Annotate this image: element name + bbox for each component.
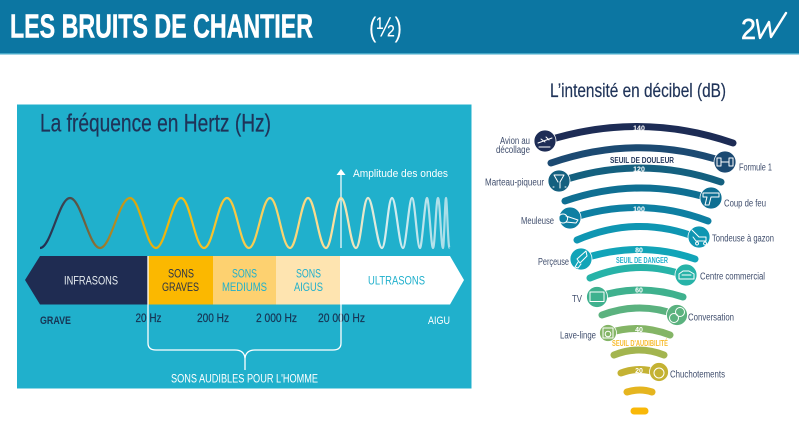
panel: frequency [17,104,472,388]
decibel values: 140 [633,126,645,132]
threshold: douleur: SEUIL DE DOULEUR [610,156,674,165]
sound source labels: Perçeuse [538,257,569,268]
decibel arcs [546,126,733,411]
audible range bracket [148,256,341,386]
icon: formula 1 [714,151,736,173]
sons mediums segment: SONS [232,266,257,280]
sound source labels: décollage [496,145,530,156]
sound source labels: Coup de feu [724,198,766,210]
decibel values: 120 [633,166,645,174]
sound source labels: Marteau-piqueur [485,178,545,188]
scale labels: 20 000 Hz [318,313,365,325]
sons mediums segment [213,256,276,304]
amplitude arrow: Amplitude des ondes [353,168,448,180]
decibel values: 80 [635,248,643,254]
sound source labels: TV [572,294,582,305]
decibel values: 20 [635,368,643,375]
icon: lawnmower [688,226,710,248]
scale labels: AIGU [428,315,450,327]
icon: grinder [559,207,581,229]
scale labels: 20 Hz [136,313,162,325]
logo 2W [741,13,786,46]
decibel values: 100 [633,206,645,214]
sound source labels: Tondeuse à gazon [712,234,774,244]
amplitude arrow [336,168,448,248]
sound source labels: Centre commercial [700,272,765,282]
audible range bracket: SONS AUDIBLES POUR L'HOMME [171,374,318,386]
sound source labels: Meuleuse [521,216,554,227]
header bar [0,0,799,54]
infrasons segment [25,256,148,304]
sound wave [40,198,450,248]
panel heading: La fréquence en Hertz (Hz) [40,110,271,138]
infrasons segment: INFRASONS [64,274,118,288]
threshold: audibilite: SEUIL D'AUDIBILITÉ [612,339,668,348]
icon: washing machine [600,324,616,342]
sons mediums segment: MEDIUMS [222,280,267,294]
decibel values [633,126,645,375]
icon: drill [570,248,592,270]
logo 2W: 2 [741,14,756,46]
sons graves segment: SONS [168,266,194,280]
decibel values: 60 [635,288,643,294]
sons graves segment: GRAVES [162,280,199,294]
icon: jackhammer [548,170,570,192]
sons aigus segment [276,256,340,304]
icon: whisper [650,362,668,382]
title: LES BRUITS DE CHANTIER [10,8,313,44]
sons aigus segment: SONS [296,266,321,280]
panel: decibel intensity [485,81,774,411]
sons graves segment [148,256,213,304]
sound source labels: Formule 1 [739,162,772,174]
sound source labels: Lave-linge [560,330,596,342]
icon: conversation [666,304,688,326]
sound source labels: Chuchotements [670,370,725,380]
page counter: (½) [369,12,402,42]
ultrasons segment: ULTRASONS [368,274,425,288]
icon: plane [534,130,556,152]
scale labels: 200 Hz [197,313,229,325]
scale labels [40,313,450,327]
icon: shopping centre [675,264,697,286]
sound source labels: Conversation [688,312,734,324]
decibel values: 40 [635,327,643,334]
frequency arrow band [25,256,464,304]
icon: tv [586,286,608,308]
sons aigus segment: AIGUS [294,280,323,294]
ultrasons segment [340,256,464,304]
scale labels: GRAVE [40,315,71,327]
threshold: danger: SEUIL DE DANGER [616,256,668,265]
icon: gun [700,187,722,209]
scale labels: 2 000 Hz [256,313,297,325]
sound source labels [485,136,774,380]
decibel heading: L’intensité en décibel (dB) [550,81,726,102]
sound source labels: Avion au [500,136,530,147]
